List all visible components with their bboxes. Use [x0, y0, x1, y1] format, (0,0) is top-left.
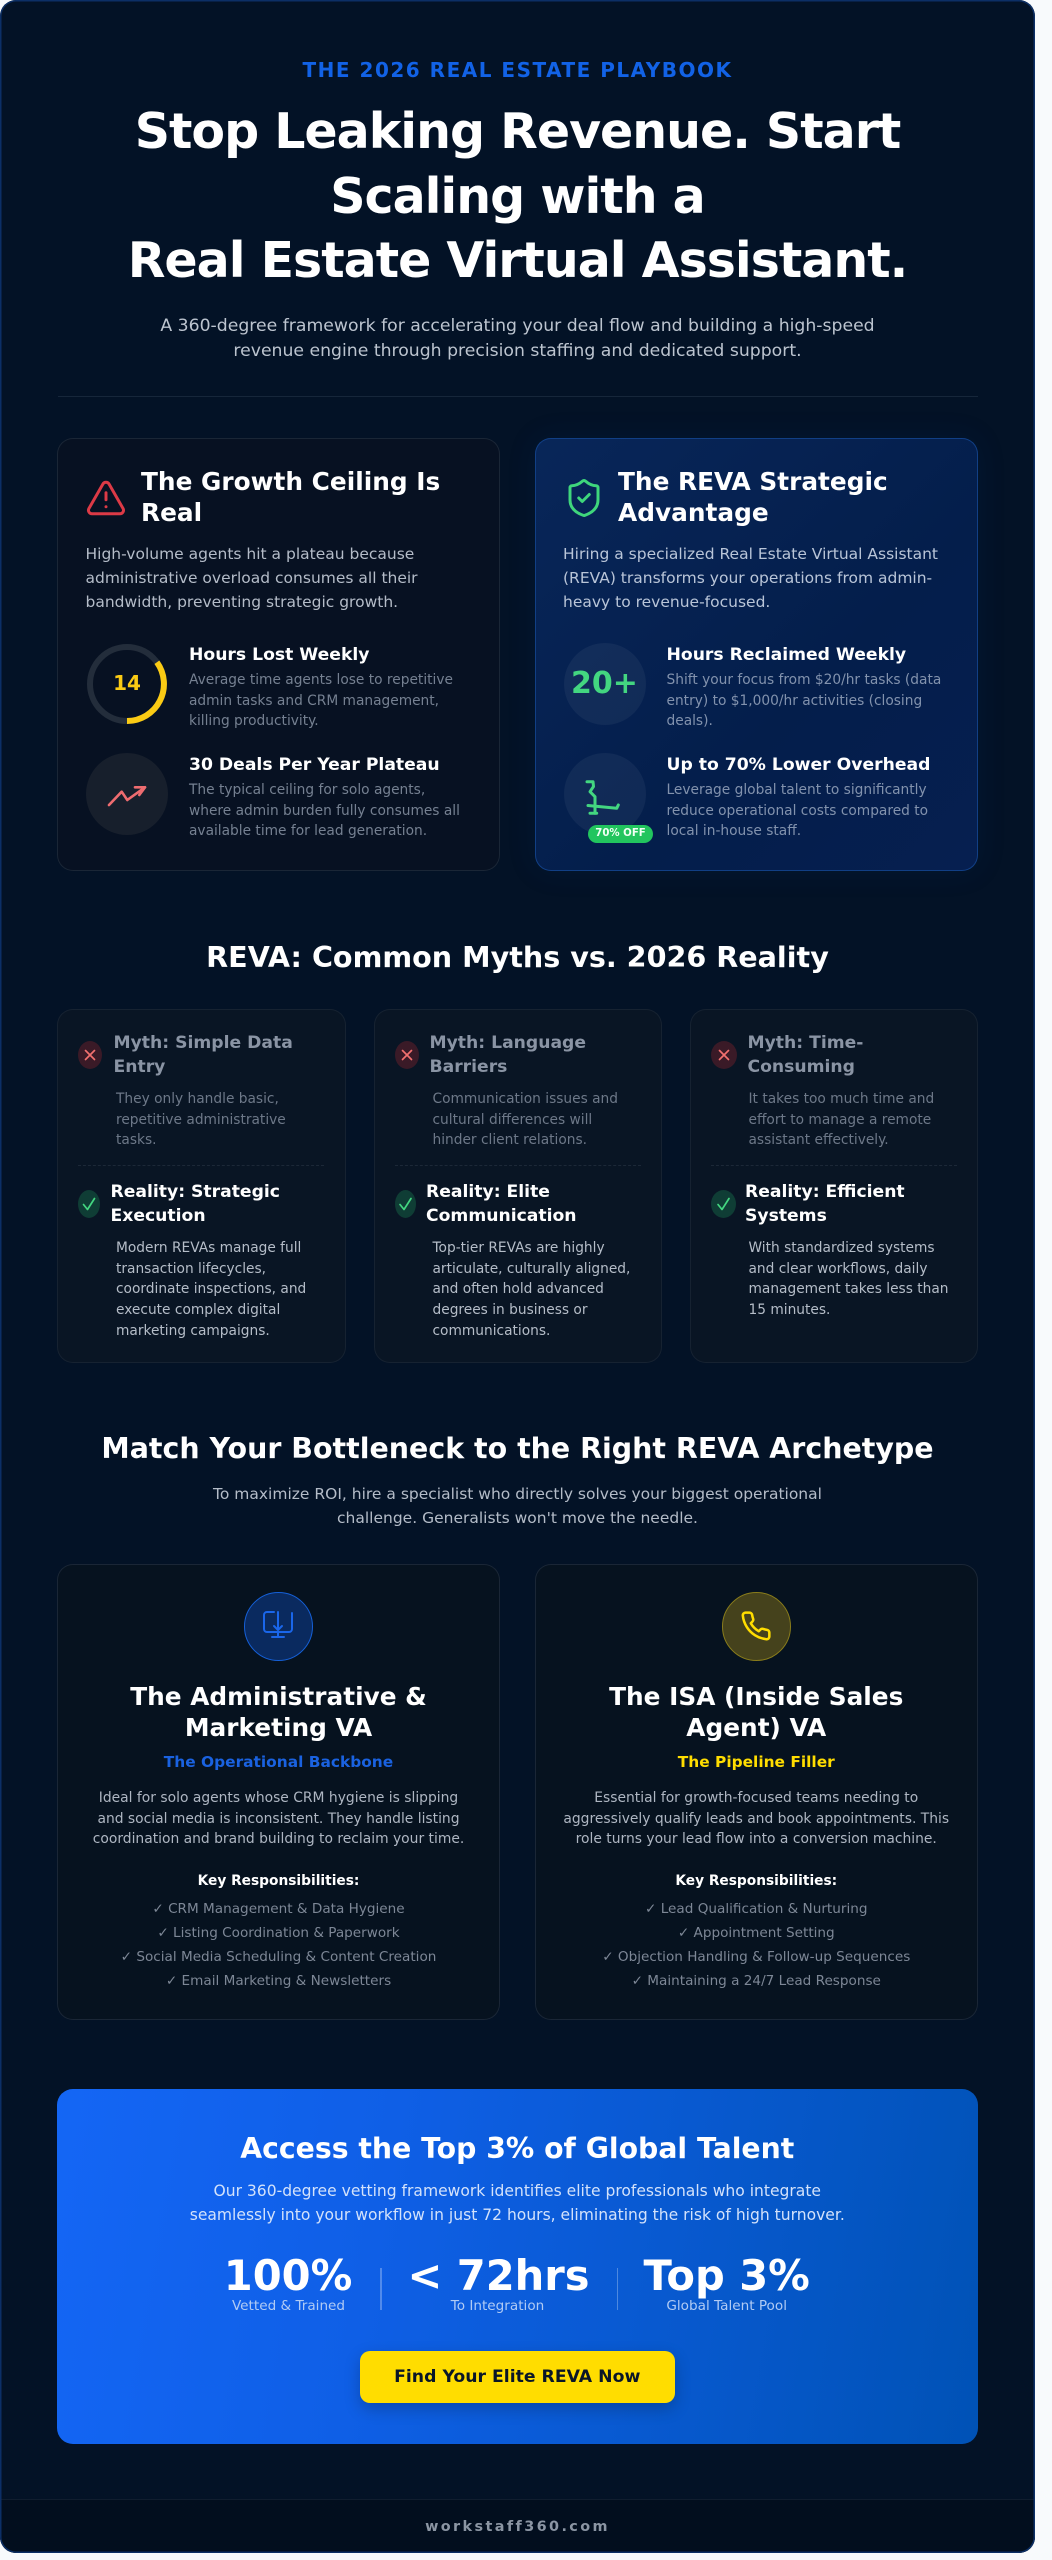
reality text: execute complex digital: [116, 1302, 280, 1318]
reality title: Systems: [745, 1206, 827, 1226]
stat ring: 14 hours: [87, 644, 167, 724]
card description: and social media is inconsistent. They handle listing: [97, 1810, 460, 1826]
stat ring: 14 hours: 14: [113, 671, 141, 695]
badge: 70% off: 70% OFF: [595, 828, 646, 839]
stat title: Hours Lost Weekly: [189, 645, 370, 665]
section subtitle: [212, 1485, 822, 1527]
icon: myth cross: [710, 1041, 736, 1069]
reality title: Execution: [110, 1206, 206, 1226]
reality title: Reality: Efficient: [745, 1182, 905, 1202]
panel: myth 3: [690, 1009, 978, 1363]
icon: reality check: [78, 1190, 100, 1218]
myth text: [748, 1091, 934, 1148]
icon: myth cross: [78, 1041, 102, 1069]
myth text: repetitive administrative: [116, 1112, 286, 1128]
reality title: [426, 1182, 577, 1226]
reality text: 15 minutes.: [748, 1302, 830, 1318]
title: Scaling with a: [330, 168, 705, 224]
stat description: Leverage global talent to significantly: [666, 782, 927, 798]
reality text: management takes less than: [748, 1281, 948, 1297]
stat description: [666, 782, 928, 839]
section subtitle: challenge. Generalists won't move the needle.: [337, 1509, 698, 1527]
responsibilities list: ✓ Maintaining a 24/7 Lead Response: [632, 1973, 881, 1989]
reality title: [110, 1182, 280, 1226]
panel heading: The Growth Ceiling Is: [141, 467, 440, 496]
panel intro: [86, 545, 418, 611]
myth title: Myth: Time-: [748, 1033, 863, 1053]
reality title: [745, 1182, 905, 1226]
badge: 70% off: [588, 825, 653, 842]
icon: phone: [722, 1592, 790, 1660]
section subtitle: To maximize ROI, hire a specialist who directly solves your biggest operational: [213, 1485, 822, 1503]
reality title: Communication: [426, 1206, 577, 1226]
panel: myth 1: [57, 1009, 346, 1363]
responsibilities list: [602, 1900, 910, 1989]
icon: reality check: [394, 1190, 416, 1218]
card description: [563, 1790, 949, 1847]
myth text: It takes too much time and: [748, 1091, 934, 1107]
myth text: hinder client relations.: [432, 1132, 587, 1148]
CTA text: Our 360-degree vetting framework identifies elite professionals who integrate: [213, 2182, 821, 2200]
stat description: [666, 672, 941, 729]
reality text: marketing campaigns.: [116, 1323, 270, 1339]
CTA button: [360, 2351, 675, 2403]
reality text: With standardized systems: [748, 1240, 935, 1256]
panel: admin and marketing VA: [57, 1564, 500, 2020]
responsibilities list: ✓ Email Marketing & Newsletters: [166, 1973, 391, 1989]
stat label: To Integration: [451, 2298, 544, 2314]
panel: REVA advantage: [535, 438, 978, 870]
myth text: assistant effectively.: [748, 1132, 889, 1148]
stat label: Global Talent Pool: [666, 2298, 787, 2314]
stat description: local in-house staff.: [666, 823, 801, 839]
myth title: [430, 1033, 586, 1077]
myth text: effort to manage a remote: [748, 1112, 931, 1128]
CTA text: seamlessly into your workflow in just 72 hours, eliminating the risk of high turnover.: [190, 2206, 845, 2224]
responsibilities list: ✓ Appointment Setting: [678, 1925, 835, 1941]
reality text: [748, 1240, 948, 1318]
myth title: Barriers: [430, 1057, 507, 1077]
stat: 20+: 20+: [571, 666, 638, 701]
stat description: where admin burden fully consumes all: [189, 803, 460, 819]
reality title: Reality: Elite: [426, 1182, 550, 1202]
panel intro: Hiring a specialized Real Estate Virtual Assistant: [563, 545, 938, 563]
myth text: tasks.: [116, 1132, 156, 1148]
reality text: [116, 1240, 306, 1339]
icon: monitor: [244, 1592, 313, 1660]
myth title: Myth: Simple Data: [114, 1033, 293, 1053]
card description: coordination and brand building to reclaim your time.: [93, 1831, 464, 1847]
card title: [609, 1682, 903, 1742]
icon: desk chair: [586, 780, 620, 815]
myth title: [114, 1033, 293, 1077]
key responsibilities label: Key Responsibilities:: [198, 1873, 359, 1889]
call to action panel: [57, 2089, 978, 2444]
icon: myth cross: [394, 1041, 418, 1069]
card tagline: The Operational Backbone: [164, 1753, 393, 1771]
card title: [130, 1682, 427, 1742]
card description: aggressively qualify leads and book appointments. This: [563, 1810, 949, 1826]
title: Real Estate Virtual Assistant.: [128, 232, 907, 289]
reality text: [432, 1240, 630, 1339]
reality text: coordinate inspections, and: [116, 1281, 306, 1297]
reality text: communications.: [432, 1323, 550, 1339]
eyebrow: THE 2026 REAL ESTATE PLAYBOOK: [303, 58, 732, 82]
panel intro: bandwidth, preventing strategic growth.: [86, 593, 398, 611]
myth title: [748, 1033, 863, 1077]
responsibilities list: ✓ CRM Management & Data Hygiene: [152, 1900, 405, 1916]
panel heading: [618, 467, 888, 527]
section heading: archetypes: Match Your Bottleneck to the Right REVA Archetype: [101, 1432, 934, 1465]
panel intro: administrative overload consumes all their: [86, 569, 418, 587]
stat: 100%: 100%: [224, 2251, 352, 2300]
icon: warning triangle: [86, 480, 125, 516]
panel intro: High-volume agents hit a plateau because: [86, 545, 414, 563]
responsibilities list: ✓ Social Media Scheduling & Content Creation: [121, 1949, 436, 1965]
panel intro: heavy to revenue-focused.: [563, 593, 770, 611]
panel intro: [563, 545, 938, 611]
stat description: killing productivity.: [189, 713, 319, 729]
card description: [93, 1790, 464, 1847]
myth text: Communication issues and: [432, 1091, 618, 1107]
icon circle: overhead: [564, 753, 646, 835]
reality text: transaction lifecycles,: [116, 1261, 266, 1277]
myth text: [116, 1091, 286, 1148]
stat description: admin tasks and CRM management,: [189, 693, 439, 709]
myth title: Consuming: [748, 1057, 855, 1077]
panel: ISA VA: [535, 1564, 978, 2020]
icon: shield check: [568, 479, 600, 517]
panel heading: Real: [141, 498, 202, 527]
stat description: reduce operational costs compared to: [666, 803, 928, 819]
responsibilities list: ✓ Objection Handling & Follow-up Sequences: [602, 1949, 910, 1965]
stat title: 30 Deals Per Year Plateau: [189, 755, 440, 775]
CTA button: Find Your Elite REVA Now: [394, 2367, 640, 2387]
panel heading: Advantage: [618, 498, 769, 527]
card description: Ideal for solo agents whose CRM hygiene is slipping: [99, 1790, 458, 1806]
title: [128, 103, 907, 289]
card description: Essential for growth-focused teams needing to: [594, 1790, 918, 1806]
panel: myth 2: [374, 1009, 662, 1363]
reality text: and often hold advanced: [432, 1281, 604, 1297]
reality text: Modern REVAs manage full: [116, 1240, 301, 1256]
myth title: Myth: Language: [430, 1033, 586, 1053]
panel heading: The REVA Strategic: [618, 467, 888, 496]
myth text: cultural differences will: [432, 1112, 592, 1128]
stat: under 72 hours: < 72hrs: [407, 2251, 590, 2300]
icon: reality check: [710, 1190, 736, 1218]
stat description: entry) to $1,000/hr activities (closing: [666, 693, 922, 709]
subtitle: revenue engine through precision staffing and dedicated support.: [233, 340, 802, 360]
stat title: Hours Reclaimed Weekly: [666, 645, 906, 665]
subtitle: [160, 316, 875, 360]
responsibilities list: ✓ Lead Qualification & Nurturing: [645, 1900, 867, 1916]
stat description: Average time agents lose to repetitive: [189, 672, 453, 688]
stat description: deals).: [666, 713, 713, 729]
panel heading: [141, 467, 440, 527]
reality text: and clear workflows, daily: [748, 1261, 927, 1277]
card title: The Administrative &: [130, 1682, 427, 1711]
myth text: [432, 1091, 618, 1148]
reality text: Top-tier REVAs are highly: [432, 1240, 605, 1256]
CTA text: [190, 2182, 845, 2224]
card title: Agent) VA: [686, 1713, 826, 1742]
stat description: The typical ceiling for solo agents,: [189, 782, 425, 798]
myth text: They only handle basic,: [116, 1091, 279, 1107]
title: Stop Leaking Revenue. Start: [135, 103, 900, 160]
panel intro: (REVA) transforms your operations from admin-: [563, 569, 932, 587]
panel: growth ceiling: [57, 438, 500, 870]
key responsibilities label: Key Responsibilities:: [675, 1873, 837, 1889]
stat description: [189, 672, 453, 729]
stat description: Shift your focus from $20/hr tasks (data: [666, 672, 941, 688]
stat description: [188, 782, 460, 839]
section heading: myths: REVA: Common Myths vs. 2026 Reality: [206, 940, 829, 974]
stat label: Vetted & Trained: [232, 2298, 345, 2314]
responsibilities list: [121, 1900, 436, 1989]
card tagline: The Pipeline Filler: [678, 1753, 835, 1771]
card title: Marketing VA: [185, 1713, 372, 1742]
subtitle: A 360-degree framework for accelerating your deal flow and building a high-speed: [160, 316, 875, 336]
card description: role turns your lead flow into a conversion machine.: [576, 1831, 937, 1847]
footer: [0, 2499, 1035, 2553]
reality title: Reality: Strategic: [110, 1182, 280, 1202]
footer domain: workstaff360.com: [425, 2519, 610, 2535]
responsibilities list: ✓ Listing Coordination & Paperwork: [157, 1925, 400, 1941]
CTA heading: Access the Top 3% of Global Talent: [240, 2132, 794, 2165]
stat: top 3%: Top 3%: [644, 2251, 810, 2300]
stat: 20+: [564, 643, 646, 725]
icon: trending line: [86, 753, 168, 835]
stat title: Up to 70% Lower Overhead: [666, 755, 930, 775]
reality text: articulate, culturally aligned,: [432, 1261, 630, 1277]
stat description: available time for lead generation.: [189, 823, 427, 839]
myth title: Entry: [114, 1057, 165, 1077]
reality text: degrees in business or: [432, 1302, 588, 1318]
card title: The ISA (Inside Sales: [609, 1682, 903, 1711]
